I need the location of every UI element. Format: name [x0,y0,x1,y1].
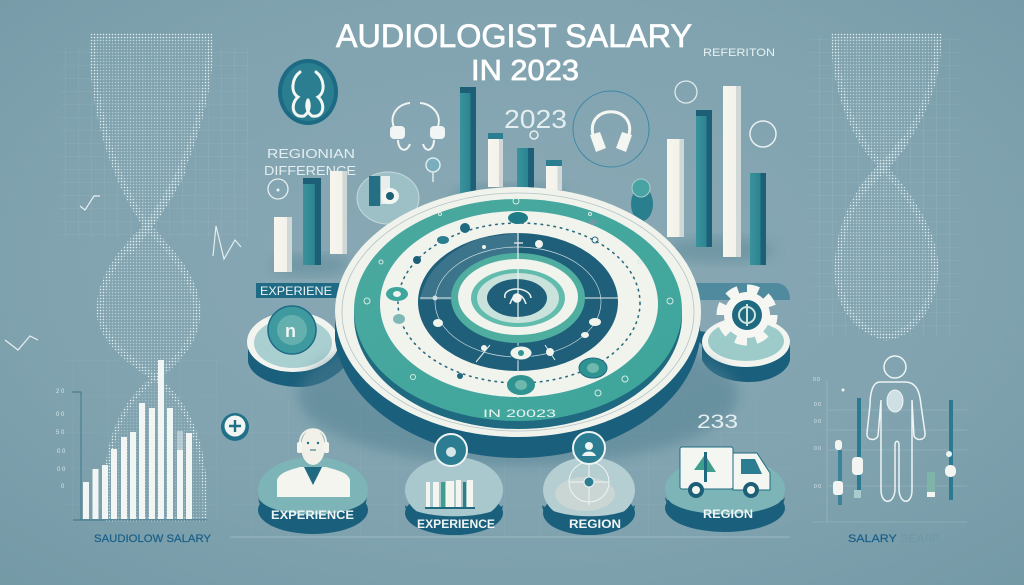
bar chart: salary lower left: 5 0 [56,430,65,436]
icon: small disc upper left of wheel [357,172,419,224]
inner thin orbit [435,247,601,357]
centre ear icon [505,289,531,304]
divider baseline [230,536,790,538]
bar chart: salary lower left: 2 0 [56,389,65,395]
right connector tag [690,283,790,300]
left pedestal: n [285,321,296,341]
label: salary lower right: SALARY SEAIIP [848,533,940,545]
bar chart: upper left [270,171,350,275]
icon: ring top right [675,81,697,103]
title [336,18,692,87]
icon: earbuds headset [391,103,444,150]
right DNA helix [835,37,938,337]
chart: human figure lower right: 0 0 [814,419,821,425]
icon: gear [722,290,772,340]
chart: human figure lower right: 0 0 [814,446,821,452]
bar chart: salary lower left: 0 0 [57,449,66,455]
vertical stem marker [514,232,523,320]
icon: headphones in circle [573,91,649,167]
icon: ring left [268,179,288,199]
label: in 2023 on wheel: IN 20023 [483,408,556,420]
orbit badges [386,219,607,395]
bar chart: upper centre [450,87,570,205]
bar chart: upper right [665,86,775,265]
centre rings [451,253,585,343]
bar chart: salary lower left [56,360,207,520]
icon: plus button [221,413,249,441]
icon: coin stack upper right of wheel [631,179,653,221]
central wheel [298,187,738,465]
label: regional difference [264,146,356,178]
icon: person with headset [277,429,350,497]
title: IN 2023 [471,55,579,87]
left DNA helix [93,37,210,520]
bottom card: region truck: REGION [703,507,753,521]
label: salary lower left: SAUDIOLOW SALARY [94,533,212,545]
chart: human figure lower right: 0 0 [813,377,820,383]
white ring [380,211,658,397]
icon: truck [680,447,770,498]
label: 2023: 2023 [504,104,567,134]
bar chart: salary lower left: 0 0 [56,412,65,418]
icon: badge [435,434,467,466]
bottom card: experience person [258,429,368,534]
icon: heart device [887,390,903,412]
icon: small lens pin [426,158,440,182]
left pedestal [247,306,350,387]
gauge sliders [833,388,956,505]
cross hair lines [420,240,618,398]
label: regional difference: DIFFERENCE [264,163,356,178]
bar chart: salary lower left: 0 0 [57,467,66,473]
label: regional difference: REGIONIAN [267,146,355,161]
bottom card: experience bars: EXPERIENCE [417,517,495,531]
dotted orbit [398,223,640,383]
right pedestal [690,290,790,382]
icon: small ring dot [530,131,538,139]
title: AUDIOLOGIST SALARY [336,18,692,54]
label: referton: REFERITON [703,47,775,59]
icon: person outline [867,356,925,501]
bottom card: region target [542,432,635,535]
top pin marker [508,212,528,224]
chart: human figure lower right: 0 0 [814,402,821,408]
bottom card: experience bars [405,434,503,535]
background grid [60,37,960,537]
small line sparklines [5,196,241,350]
teal ring small marks [364,198,673,396]
icon: badge [573,432,605,464]
icon: ring right [750,121,776,147]
bottom card: region truck [665,447,785,532]
bottom card: experience person: EXPERIENCE [271,508,354,522]
bar chart: salary lower left: 0 [61,484,65,490]
navy disc [418,233,618,371]
chart: human figure lower right: 0 0 [814,484,821,490]
label: experience tag: EXPERIENE [260,284,332,298]
icon: ear badge [278,59,338,125]
bottom card: region target: REGION [569,517,621,531]
label: 233: 233 [697,412,738,433]
teal ring [354,199,682,421]
chart: human figure lower right [813,356,967,522]
